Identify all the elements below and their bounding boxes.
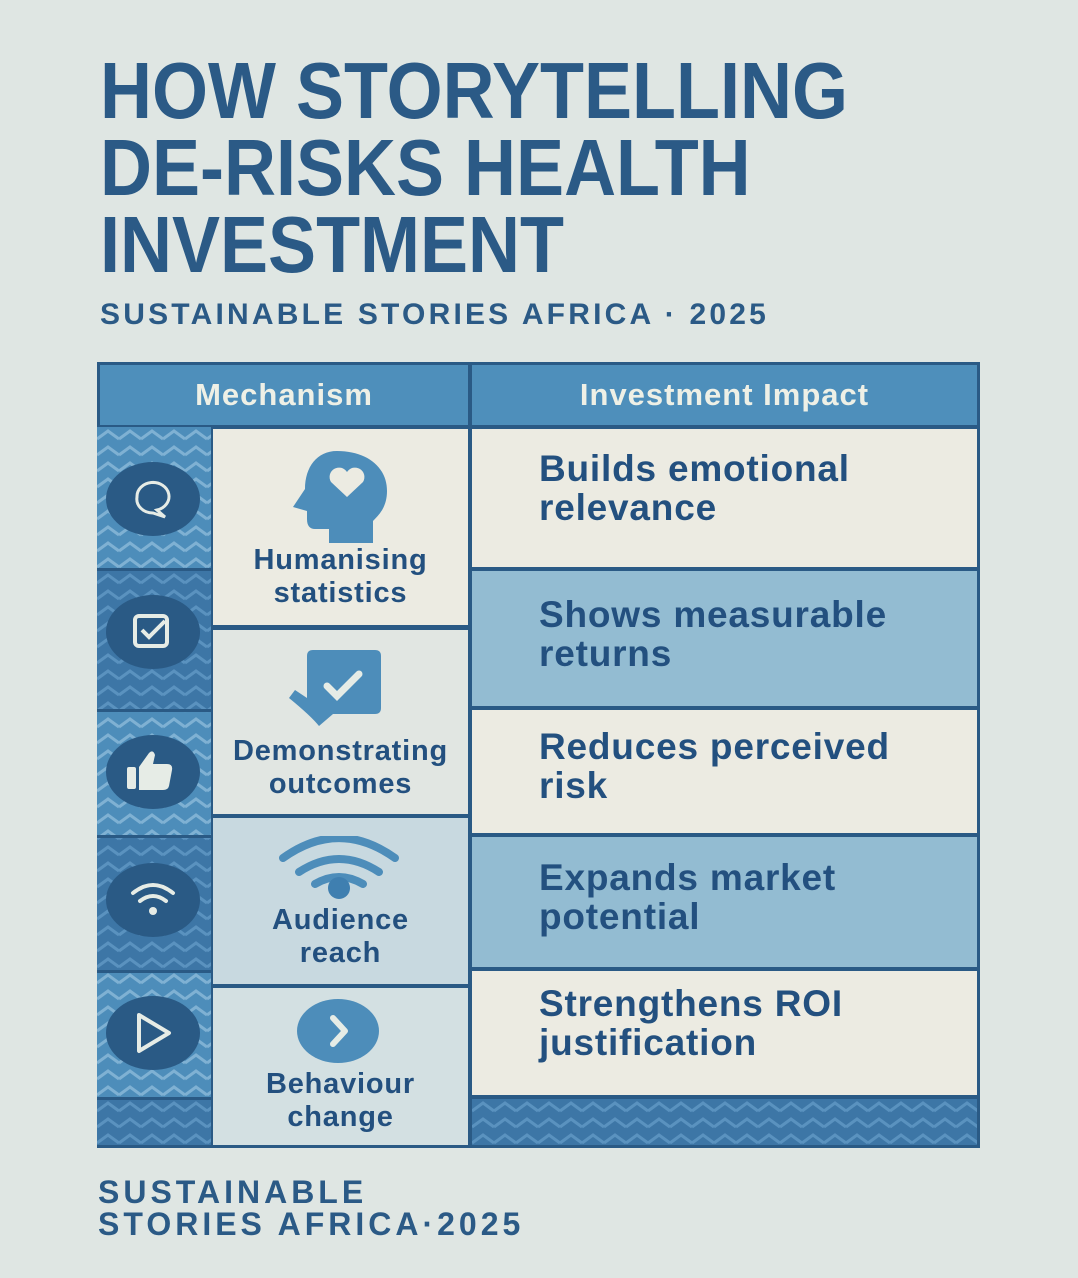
impact: expands market potential: Expands market	[539, 857, 836, 898]
impact: builds emotional relevance: Builds emotional	[539, 448, 850, 489]
impact: shows measurable returns: Shows measurable	[539, 594, 887, 634]
impact: shows measurable returns	[472, 571, 977, 706]
icon: wifi	[106, 863, 200, 937]
icon: thumbs up	[106, 735, 200, 809]
impact: builds emotional relevance: relevance	[539, 487, 717, 528]
impact: reduces perceived risk: risk	[539, 764, 608, 806]
impact: strengthens ROI justification	[472, 971, 977, 1095]
mechanism: audience reach	[213, 818, 468, 984]
table	[97, 362, 980, 1148]
impact: strengthens ROI justification: justification	[539, 1022, 757, 1063]
icon: checkbox	[106, 595, 200, 669]
header: mechanism	[100, 365, 468, 425]
mechanism: audience reach: reach	[300, 937, 381, 969]
icon strip	[97, 427, 211, 1145]
mechanism: demonstrating outcomes	[213, 630, 468, 814]
subtitle: SUSTAINABLE STORIES AFRICA · 2025	[100, 298, 769, 331]
impact: reduces perceived risk	[472, 710, 977, 833]
mechanism: behaviour change: change	[287, 1101, 394, 1133]
bottom pattern strip	[472, 1099, 977, 1145]
mechanism: humanising statistics: Humanising	[254, 544, 427, 576]
footer	[98, 1174, 524, 1242]
impact: shows measurable returns: returns	[539, 632, 672, 674]
mechanism: behaviour change	[213, 988, 468, 1145]
mechanism: humanising statistics: statistics	[274, 577, 407, 609]
mechanism: demonstrating outcomes: Demonstrating	[233, 735, 448, 767]
impact: expands market potential: potential	[539, 896, 700, 937]
icon: play	[106, 996, 200, 1070]
mechanism: demonstrating outcomes: outcomes	[269, 768, 412, 800]
title: INVESTMENT	[100, 200, 564, 289]
title: DE-RISKS HEALTH	[100, 123, 751, 212]
impact: builds emotional relevance	[472, 429, 977, 567]
footer: SUSTAINABLE	[98, 1174, 367, 1210]
impact: strengthens ROI justification: Strengthens ROI	[539, 983, 843, 1024]
mechanism: behaviour change: Behaviour	[266, 1068, 415, 1100]
mechanism: humanising statistics	[213, 429, 468, 625]
title	[100, 46, 848, 289]
icon: chat	[106, 462, 200, 536]
header: investment impact	[472, 365, 977, 425]
impact: reduces perceived risk: Reduces perceived	[539, 726, 890, 766]
footer: STORIES AFRICA·2025	[98, 1206, 524, 1242]
title: HOW STORYTELLING	[100, 46, 848, 135]
mechanism: audience reach: Audience	[272, 904, 409, 936]
header: mechanism: Mechanism	[195, 377, 373, 412]
impact: expands market potential	[472, 837, 977, 967]
header: investment impact: Investment Impact	[580, 377, 869, 412]
